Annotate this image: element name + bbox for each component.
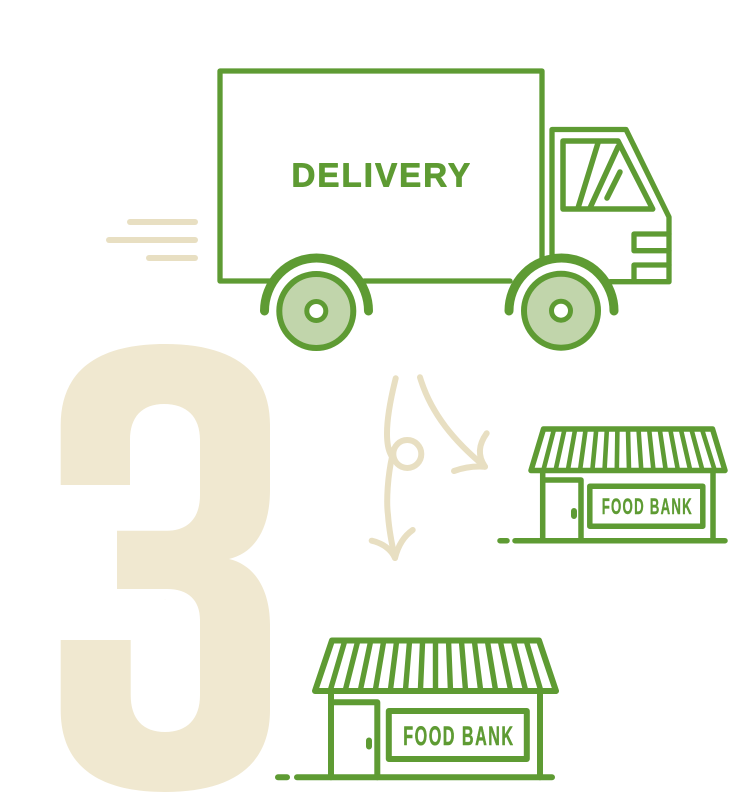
food bank store: lower centre [278,640,556,777]
delivery truck [220,71,669,348]
sign [389,711,527,759]
food bank store: upper right [500,429,725,541]
door [543,480,581,541]
awning [315,640,556,691]
front wheel [509,258,614,348]
sign [590,486,703,526]
sign: FOOD BANK [403,721,513,751]
door [331,702,377,777]
motion lines [109,222,195,258]
awning [531,429,725,470]
walls [543,471,713,541]
truck cab [552,130,669,282]
walls [331,692,540,777]
arrow: curved to upper food bank [420,377,487,471]
cab window [563,141,653,209]
large step number 3: 3 [165,599,166,601]
large step number 3 [61,344,270,792]
rear wheel [264,258,368,348]
truck cargo box [220,71,542,281]
delivery label: DELIVERY [292,156,470,194]
sign: FOOD BANK [602,495,692,519]
ground line [278,774,552,780]
cab grille [634,234,669,281]
ground line [500,538,725,543]
arrow: looped down to lower food bank [372,378,421,558]
